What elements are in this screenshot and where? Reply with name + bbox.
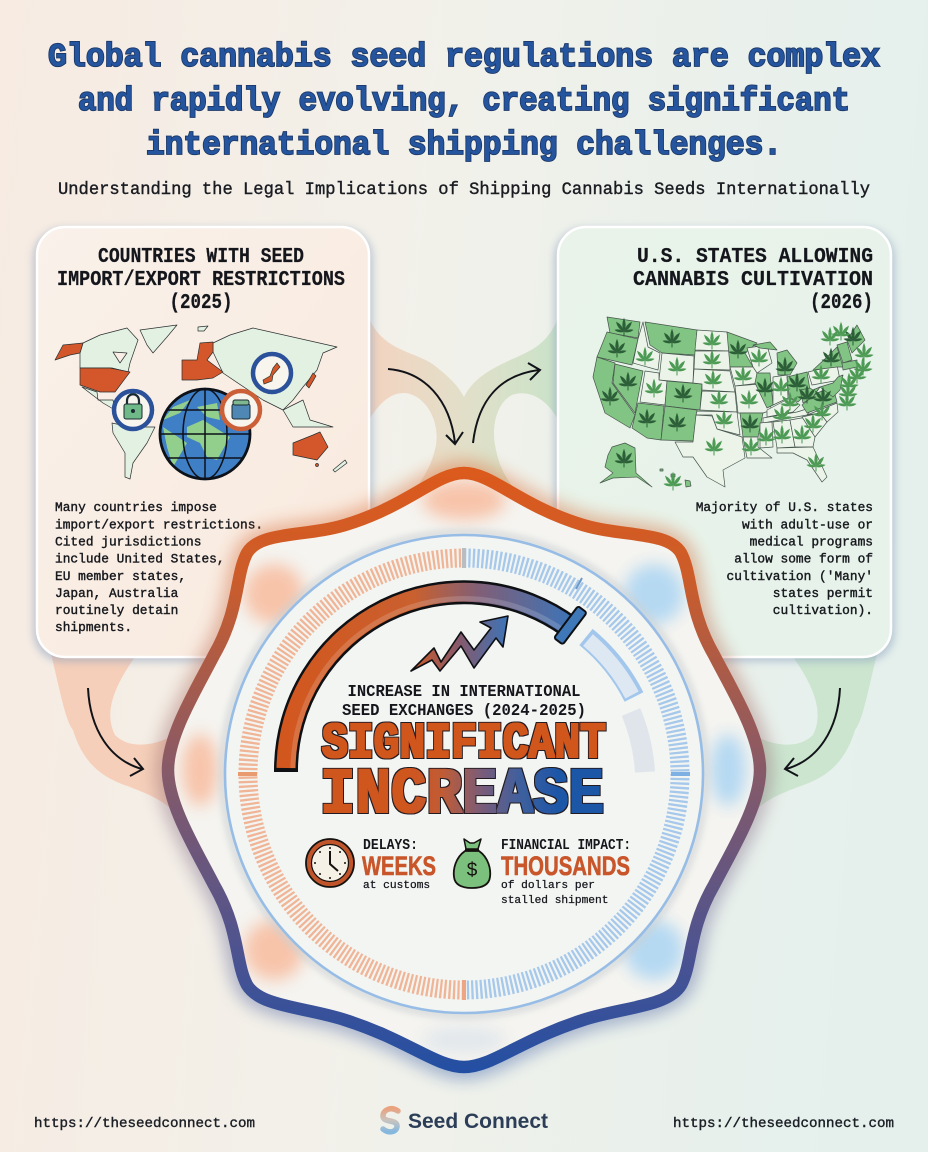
stat label: INCREASE IN INTERNATIONAL xyxy=(348,683,580,702)
cannabis leaves: adult-use states xyxy=(600,318,863,467)
lobe tints xyxy=(182,480,746,1052)
panel shadows xyxy=(33,228,895,662)
stat: financial impact: of dollars per xyxy=(501,880,595,892)
badge glow xyxy=(168,473,760,1067)
title xyxy=(48,39,880,164)
body text: Majority of U.S. states xyxy=(696,500,873,515)
stat: financial impact: THOUSANDS xyxy=(501,851,630,881)
stat: delays xyxy=(362,837,436,892)
body text: Many countries impose xyxy=(55,500,217,515)
icon: lock badge xyxy=(114,391,152,429)
body text: Cited jurisdictions xyxy=(55,534,201,550)
connector: right panel to badge xyxy=(713,650,878,822)
body text: routinely detain xyxy=(55,603,178,618)
connector: panels to centre badge xyxy=(369,318,558,490)
heading: IMPORT/EXPORT RESTRICTIONS xyxy=(57,269,345,292)
US map xyxy=(593,317,865,487)
subtitle: Understanding the Legal Implications of Shipping Cannabis Seeds Internationally xyxy=(58,181,870,200)
body text xyxy=(696,500,873,618)
icon: rising arrow xyxy=(411,616,508,671)
logo wordmark: Seed Connect xyxy=(408,1110,548,1133)
body text: cultivation ('Many' xyxy=(727,569,873,584)
title: Global cannabis seed regulations are complex xyxy=(48,39,880,76)
body text: with adult-use or xyxy=(742,518,873,532)
body text: Japan, Australia xyxy=(55,586,179,601)
body text: shipments. xyxy=(55,620,132,635)
body text: allow some form of xyxy=(734,552,873,566)
icon: clock xyxy=(306,839,354,887)
footer: url right: https://theseedconnect.com xyxy=(673,1116,894,1132)
title: international shipping challenges. xyxy=(146,127,782,164)
body text: medical programs xyxy=(750,534,873,550)
gauge ghost segment xyxy=(586,637,634,697)
heading xyxy=(633,246,873,315)
stat: financial impact: stalled shipment xyxy=(501,895,608,907)
panel: countries with restrictions xyxy=(37,227,369,657)
badge fill xyxy=(168,473,760,1067)
panel: US states xyxy=(558,227,891,657)
stat: delays: at customs xyxy=(363,880,430,892)
cannabis leaves: other states xyxy=(635,322,874,490)
body text xyxy=(55,500,263,635)
body text: cultivation). xyxy=(773,603,873,618)
heading: COUNTRIES WITH SEED xyxy=(98,246,304,269)
body text: import/export restrictions. xyxy=(55,518,263,532)
world map xyxy=(55,325,347,479)
icon: money bag: $ xyxy=(467,860,478,881)
icon: globe xyxy=(160,389,250,479)
big number: significant: SIGNIFICANT xyxy=(322,716,606,773)
body text: EU member states, xyxy=(55,569,186,584)
icon: money bag xyxy=(454,839,490,888)
gauge ghost segment faint xyxy=(631,712,645,772)
ring shadow xyxy=(218,528,710,1020)
tick markers xyxy=(238,548,690,1000)
tick ring: blue half xyxy=(464,558,680,990)
heading: U.S. STATES ALLOWING xyxy=(637,246,873,269)
arrow: left panel to centre xyxy=(388,369,463,444)
heading: (2026) xyxy=(810,292,873,315)
logo mark xyxy=(383,1109,398,1132)
body text: states permit xyxy=(773,586,873,601)
stat: financial impact: FINANCIAL IMPACT: xyxy=(501,837,631,854)
heading: (2025) xyxy=(170,292,232,315)
stat: delays: DELAYS: xyxy=(363,837,418,854)
icon: Japan badge xyxy=(253,354,291,392)
stat: delays: WEEKS xyxy=(362,851,436,881)
badge outline xyxy=(168,473,760,1067)
footer: logo xyxy=(383,1109,548,1133)
title: and rapidly evolving, creating significant xyxy=(78,83,850,120)
icon: customs badge xyxy=(222,391,260,429)
gauge handle xyxy=(554,606,587,645)
stat: financial impact xyxy=(501,837,631,907)
tick ring: orange half xyxy=(248,558,464,990)
central badge xyxy=(168,473,760,1067)
stat label xyxy=(342,683,586,721)
heading: CANNABIS CULTIVATION xyxy=(633,269,873,292)
stat label: SEED EXCHANGES (2024-2025) xyxy=(342,702,586,721)
inner dial xyxy=(225,535,703,1013)
connector: left panel to badge xyxy=(50,650,215,822)
gauge arc xyxy=(286,592,571,772)
body text: include United States, xyxy=(55,552,225,566)
arrow: left panel to badge xyxy=(88,688,143,776)
big number: increase: INCREASE xyxy=(320,760,604,832)
arrow: right panel to badge xyxy=(785,688,840,776)
heading xyxy=(57,246,345,315)
arrow: centre to right panel xyxy=(473,363,540,443)
footer: url left: https://theseedconnect.com xyxy=(34,1116,255,1132)
